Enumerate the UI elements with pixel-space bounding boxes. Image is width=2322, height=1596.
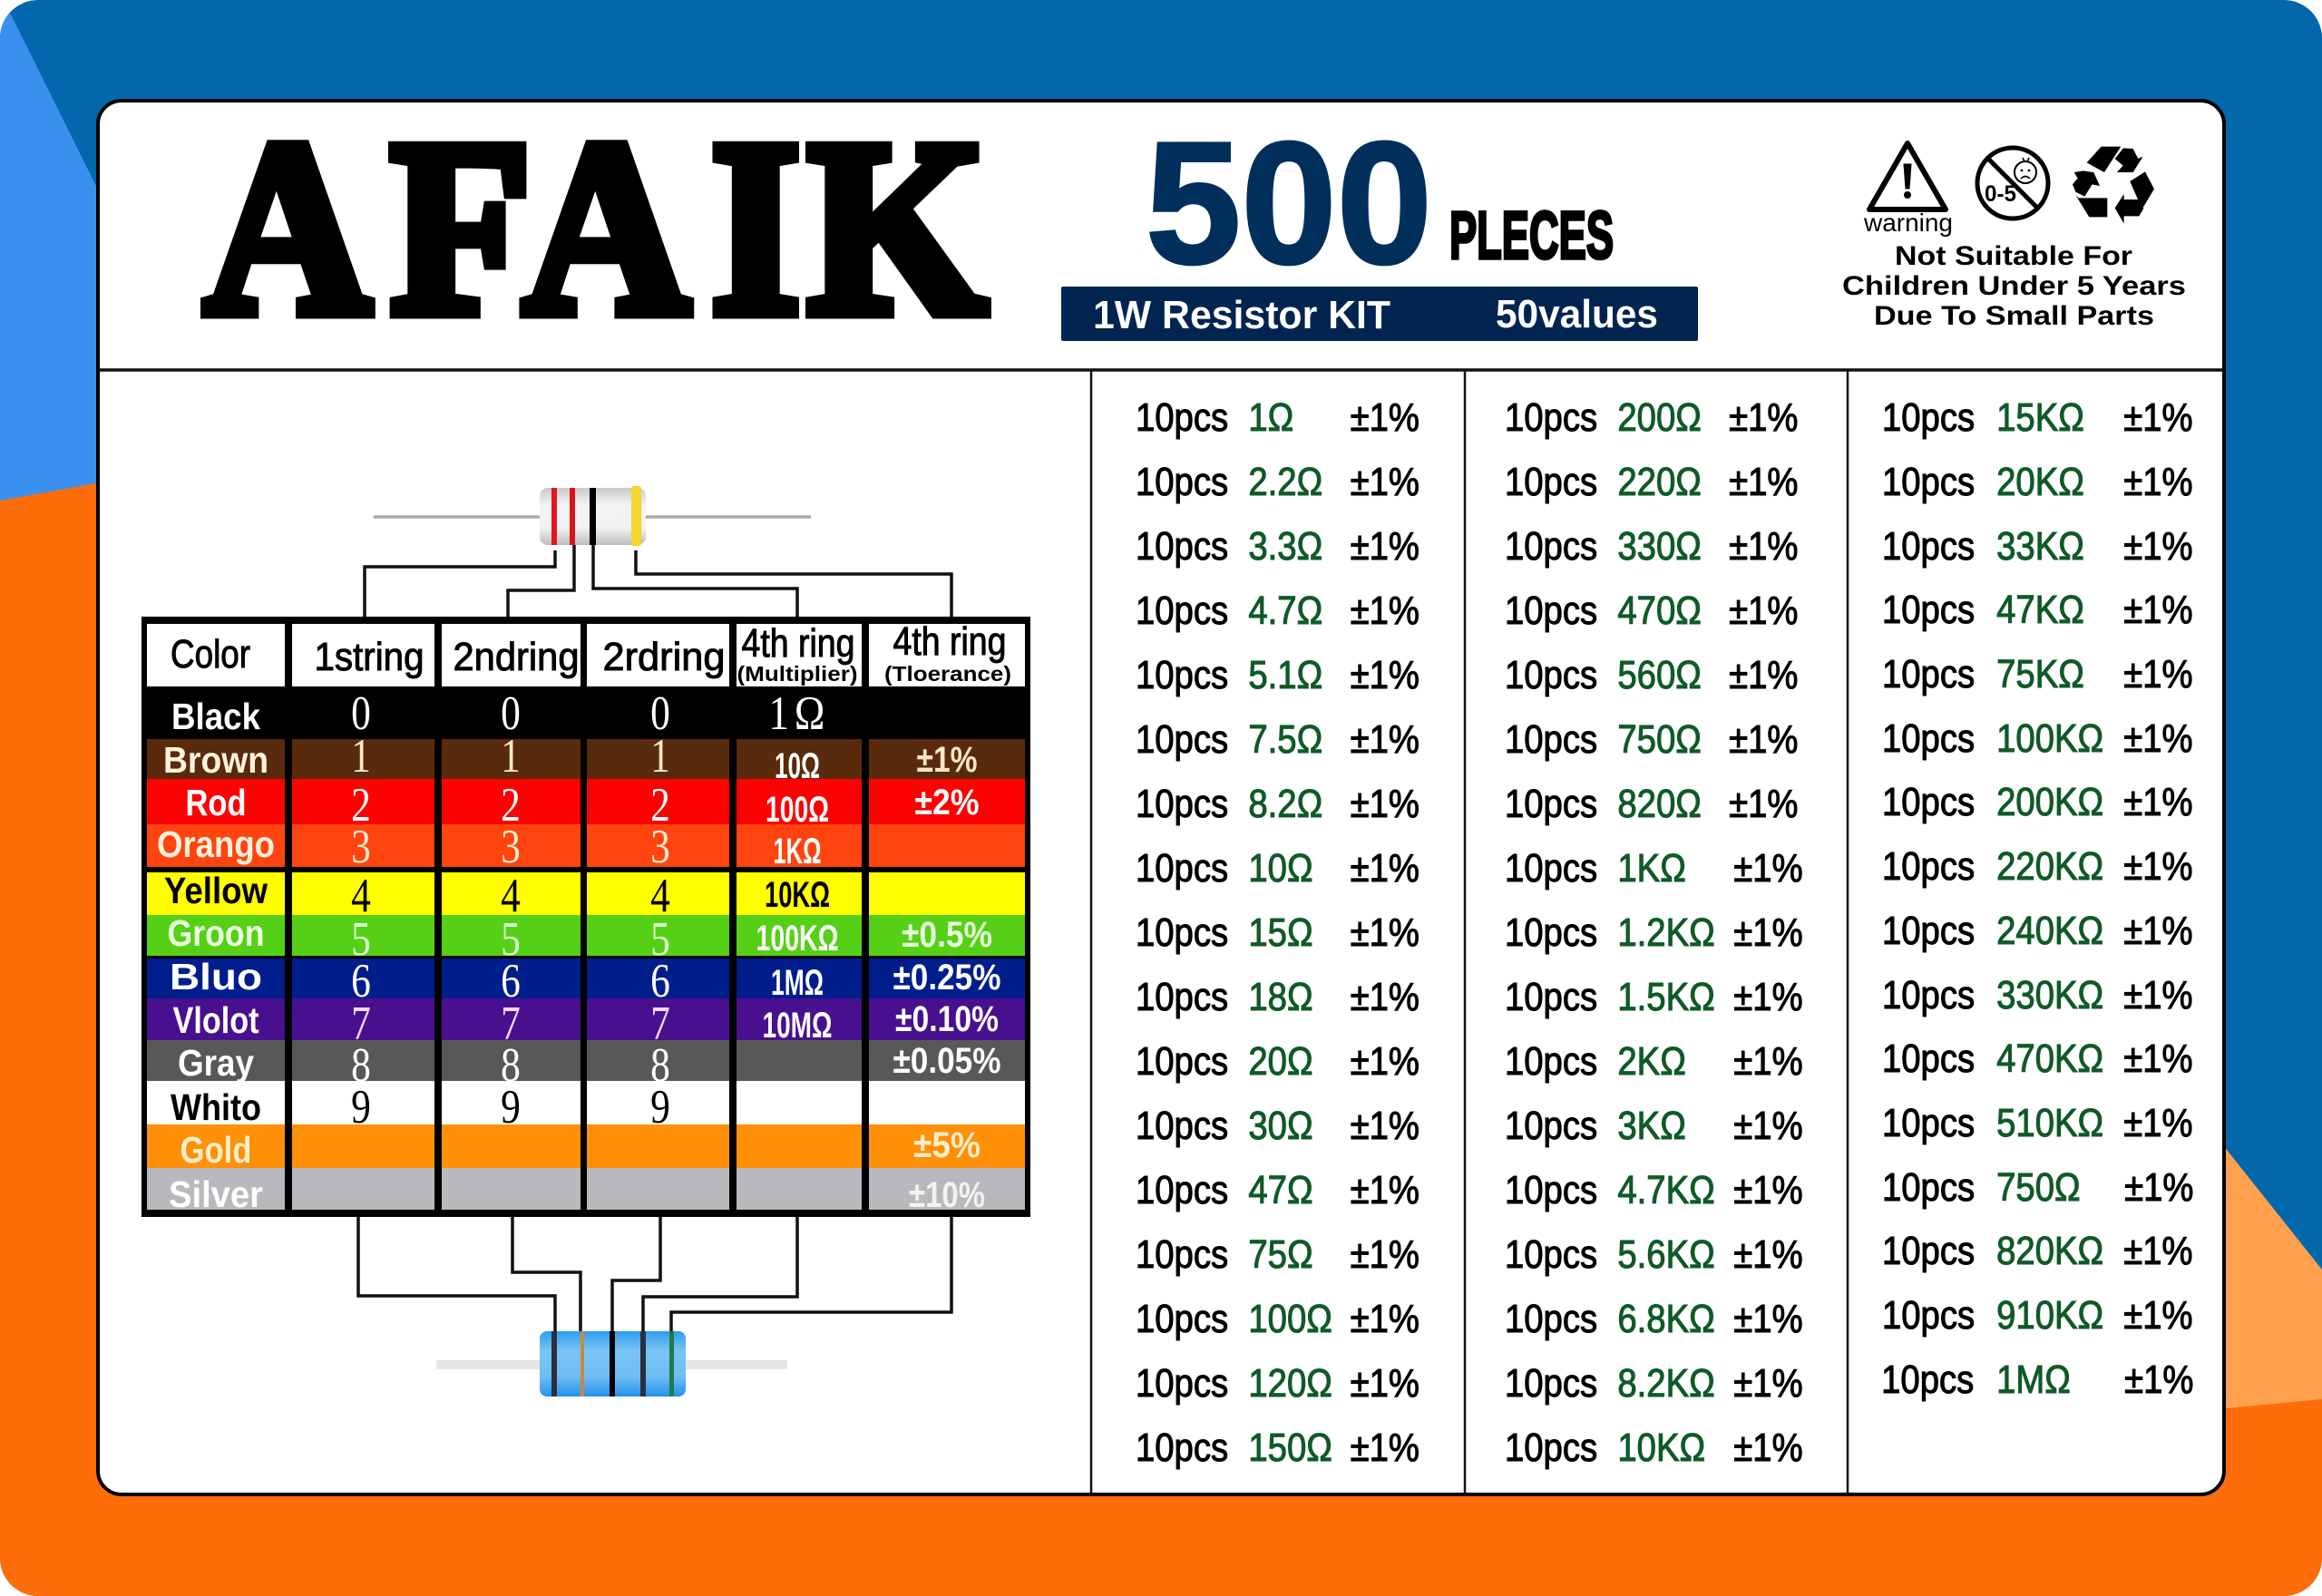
value list column 3: 10pcs [1882,1229,1975,1273]
value list column 1: 1Ω [1248,395,1293,440]
value list column 1: ±1% [1351,846,1420,890]
icon: warning triangle: warning [1863,209,1953,237]
value list column 2: 10pcs [1505,1168,1597,1212]
multiplier column: 10KΩ [765,875,830,915]
value list column 2: 820Ω [1617,782,1702,826]
digit columns: 7 [351,998,371,1050]
digit columns: 6 [351,955,371,1007]
value list column 1: ±1% [1351,653,1420,697]
value list column 1: 8.2Ω [1248,782,1322,826]
value list column 3: 910KΩ [1996,1293,2103,1338]
value list column 3: 820KΩ [1996,1229,2103,1273]
value list column 3: ±1% [2124,1358,2193,1402]
header divider and column dividers [98,370,2224,1494]
value list column 1: 10pcs [1136,975,1228,1019]
value list column 2: ±1% [1729,589,1798,633]
digit columns: 3 [650,821,670,873]
value list column 1: 10pcs [1136,524,1228,569]
column gutters [285,689,869,1212]
value list column 2: 1.2KΩ [1617,910,1715,955]
value list column 1: 5.1Ω [1248,653,1322,697]
value list column 2: 10pcs [1505,589,1597,633]
digit columns: 4 [501,870,521,922]
digit columns: 2 [650,779,670,832]
value list column 3: 10pcs [1882,460,1975,504]
color names [157,696,275,1215]
value list column 2: 560Ω [1617,653,1702,697]
value list column 1: 47Ω [1248,1168,1313,1212]
value list column 1: 10pcs [1136,1232,1228,1277]
connector lines bottom [358,1217,951,1333]
value list column 3: ±1% [2123,652,2193,696]
digit columns: 7 [650,998,670,1050]
value list column 3: 15KΩ [1996,395,2084,440]
value list column 2: 1KΩ [1617,846,1686,890]
digit columns: 9 [650,1081,670,1134]
tolerance column: ±0.25% [893,958,1001,998]
icon: not for ages 0-5: 0-5 [1985,181,2016,207]
value list column 1: 30Ω [1248,1104,1313,1148]
value list column 1: 10pcs [1136,1297,1228,1341]
value list column 2: 8.2KΩ [1617,1361,1715,1406]
value list column 1: 3.3Ω [1248,524,1322,569]
value list column 2: ±1% [1729,524,1798,569]
value list column 3: ±1% [2123,395,2193,440]
tolerance column: ±0.10% [895,999,999,1039]
value list column 2: 200Ω [1617,395,1702,440]
value list column 1: 100Ω [1248,1297,1332,1341]
value list column 3: ±1% [2123,1293,2193,1338]
value list column 3: 10pcs [1881,1358,1974,1402]
color names: Groon [167,912,265,954]
value list column 2: 10pcs [1505,717,1597,762]
value list column 2: ±1% [1733,1039,1803,1084]
value list column 1: 7.5Ω [1248,717,1322,762]
digit columns: 0 [501,687,521,740]
tolerance column: ±1% [916,740,978,780]
value list column 3: 10pcs [1882,716,1975,761]
digit columns: 2 [351,779,371,832]
value list column 1: ±1% [1351,1168,1420,1212]
digit columns: 1 [501,730,521,783]
warning text [1842,241,2186,331]
value list column 2: 2KΩ [1617,1039,1686,1084]
value list column 3: 20KΩ [1996,460,2084,504]
value list column 3: 10pcs [1882,524,1975,569]
value list column 3: ±1% [2124,1165,2193,1210]
digit columns: 5 [501,913,521,966]
multiplier column: 1MΩ [771,963,824,1003]
multiplier column: 1 [768,686,789,740]
value list column 3: ±1% [2123,973,2193,1017]
header cells [147,624,1025,686]
digit columns: 1 [351,730,371,783]
top resistor [374,486,811,546]
digit columns: 4 [351,870,371,922]
value list column 1: 150Ω [1248,1426,1332,1470]
value list column 1: 10pcs [1136,1039,1228,1084]
color names: Orango [157,823,275,865]
value list column 2: 6.8KΩ [1617,1297,1715,1341]
color names: Silver [169,1173,263,1215]
value list column 2: 330Ω [1617,524,1702,569]
digit columns: 0 [351,687,371,740]
value list column 2: 10pcs [1505,1104,1597,1148]
warning text: Children Under 5 Years [1842,271,2186,301]
digit columns: 0 [650,687,670,740]
kit banner: 50values [1496,292,1658,336]
value list column 3: ±1% [2123,716,2193,761]
tolerance column: ±0.5% [902,915,992,955]
value list column 3: 10pcs [1882,973,1975,1017]
icon: recycling arrows [2073,147,2154,224]
value list column 1: ±1% [1351,782,1420,826]
value list column 3: 33KΩ [1996,524,2084,569]
value list column 2: ±1% [1729,460,1798,504]
value list column 1: 75Ω [1248,1232,1313,1277]
value list column 1 [1136,395,1420,1470]
tolerance column [893,740,1001,1215]
kit banner: 1W Resistor KIT [1093,293,1390,337]
value list column 1: 10pcs [1136,589,1228,633]
value list column 1: ±1% [1351,1104,1420,1148]
value list column 2: 1.5KΩ [1617,975,1715,1019]
digit columns: 9 [501,1081,521,1134]
value list column 2: ±1% [1733,910,1803,955]
value list column 3: 10pcs [1882,1165,1975,1210]
tolerance column: ±10% [909,1175,985,1215]
table headings: 2rdring [602,635,726,679]
value list column 2: 10pcs [1505,653,1597,697]
value list column 1: 4.7Ω [1248,589,1322,633]
value list column 2: 10pcs [1505,846,1597,890]
value list column 2: 750Ω [1617,717,1702,762]
table headings: 4th ring [742,621,854,666]
value list column 3: 100KΩ [1996,716,2103,761]
value list column 3: 10pcs [1882,844,1975,889]
digit columns: 8 [351,1039,371,1092]
value list column 3: ±1% [2123,780,2193,824]
multiplier column: 10MΩ [762,1006,833,1046]
value list column 3: 10pcs [1882,652,1975,696]
value list column 1: 10pcs [1136,1361,1228,1406]
value list column 1: 120Ω [1248,1361,1332,1406]
warning text: Not Suitable For [1895,241,2132,271]
value list column 1: 10pcs [1136,653,1228,697]
value list column 3: 75KΩ [1996,652,2084,696]
digit columns: 1 [650,730,670,783]
value list column 3: 1MΩ [1996,1358,2071,1402]
value list column 1: 10pcs [1136,717,1228,762]
value list column 1: 10pcs [1136,460,1228,504]
value list column 2: 10pcs [1505,1232,1597,1277]
value list column 3: 10pcs [1882,588,1975,632]
value list column 1: 10pcs [1136,1426,1228,1470]
color rows [147,739,1025,1210]
value list column 2: ±1% [1733,1426,1803,1470]
value list column 2: 10pcs [1505,1361,1597,1406]
value list column 3: 470KΩ [1996,1036,2103,1081]
value list column 1: 10pcs [1136,1168,1228,1212]
table headings: 2ndring [454,635,579,679]
bottom resistor [436,1331,787,1396]
value list column 1: 10pcs [1136,910,1228,955]
value list column 2: ±1% [1733,1361,1803,1406]
value list column 2: 220Ω [1617,460,1702,504]
value list column 3: 10pcs [1882,780,1975,824]
value list column 2: 10pcs [1505,524,1597,569]
value list column 2: 10pcs [1505,1426,1597,1470]
value list column 1: ±1% [1351,1426,1420,1470]
value list column 1: ±1% [1351,524,1420,569]
value list column 1: ±1% [1351,975,1420,1019]
digit columns: 5 [351,913,371,966]
value list column 1: ±1% [1351,589,1420,633]
value list column 3 [1881,395,2193,1402]
kit banner [1061,287,1698,341]
value list column 1: 20Ω [1248,1039,1313,1084]
value list column 1: ±1% [1351,717,1420,762]
digit columns: 5 [650,913,670,966]
value list column 2: ±1% [1733,975,1803,1019]
color names: Whito [171,1086,261,1128]
digit columns: 6 [650,955,670,1007]
value list column 3: ±1% [2123,588,2193,632]
multiplier column: 1KΩ [773,832,822,871]
piece count 500: 500 [1146,105,1432,300]
value list column 1: 10pcs [1136,1104,1228,1148]
value list column 3: ±1% [2123,909,2193,953]
value list column 2 [1505,395,1803,1470]
color names: Vlolot [172,999,259,1041]
value list column 2: 4.7KΩ [1617,1168,1715,1212]
digit columns: 4 [650,870,670,922]
value list column 3: 750Ω [1996,1165,2081,1210]
table headings [171,619,1011,686]
table headings: (Multiplier) [737,662,858,686]
value list column 1: 10pcs [1136,782,1228,826]
value list column 2: ±1% [1733,846,1803,890]
warning text: Due To Small Parts [1874,301,2154,331]
value list column 1: 10pcs [1136,846,1228,890]
multiplier column: 100Ω [766,790,829,830]
color names: Yellow [164,870,268,911]
value list column 1: ±1% [1351,395,1420,440]
pieces label: PLECES [1449,198,1614,273]
value list column 3: ±1% [2123,460,2193,504]
value list column 3: 10pcs [1882,395,1975,440]
value list column 2: 10pcs [1505,1039,1597,1084]
value list column 2: ±1% [1729,395,1798,440]
value list column 1: ±1% [1351,910,1420,955]
color names: Rod [185,782,247,823]
value list column 2: ±1% [1729,653,1798,697]
value list column 3: 10pcs [1882,1293,1975,1338]
brand title: AFAIK [204,90,988,366]
value list column 3: 510KΩ [1996,1101,2103,1145]
value list column 3: 240KΩ [1996,909,2103,953]
digit columns: 2 [501,779,521,832]
value list column 3: 10pcs [1882,1101,1975,1145]
value list column 1: ±1% [1351,1232,1420,1277]
value list column 2: 10pcs [1505,395,1597,440]
value list column 3: ±1% [2123,844,2193,889]
value list column 2: 3KΩ [1617,1104,1686,1148]
value list column 2: 10pcs [1505,460,1597,504]
icon: not for ages 0-5 [1977,148,2048,219]
value list column 1: ±1% [1351,1297,1420,1341]
value list column 2: 10pcs [1505,1297,1597,1341]
table headings: (Tloerance) [884,662,1011,686]
value list column 2: 10pcs [1505,910,1597,955]
value list column 2: 10pcs [1505,975,1597,1019]
value list column 3: 330KΩ [1996,973,2103,1017]
value list column 2: ±1% [1729,717,1798,762]
digit columns: 8 [501,1039,521,1092]
table headings: 1string [314,635,424,679]
color code table [141,617,1030,1217]
value list column 2: 470Ω [1617,589,1702,633]
card panel [98,101,2224,1494]
value list column 2: 10KΩ [1617,1426,1705,1470]
value list column 2: 10pcs [1505,782,1597,826]
digit columns: 7 [501,998,521,1050]
multiplier column: Ω [795,686,824,740]
value list column 3: 10pcs [1882,909,1975,953]
value list column 3: 200KΩ [1996,780,2103,824]
value list column 3: 220KΩ [1996,844,2103,889]
digit columns [351,687,670,1134]
value list column 1: ±1% [1351,460,1420,504]
digit columns: 3 [501,821,521,873]
digit columns: 6 [501,955,521,1007]
value list column 3: ±1% [2123,524,2193,569]
value list column 1: ±1% [1351,1361,1420,1406]
value list column 2: ±1% [1733,1168,1803,1212]
value list column 1: 15Ω [1248,910,1313,955]
tolerance column: ±2% [914,783,980,822]
value list column 1: 2.2Ω [1248,460,1322,504]
multiplier column [756,686,838,1046]
color names: Gray [178,1042,254,1084]
digit columns: 9 [351,1081,371,1134]
tolerance column: ±5% [913,1125,981,1165]
value list column 1: ±1% [1351,1039,1420,1084]
color names: Bluo [170,956,262,998]
digit columns: 3 [351,821,371,873]
multiplier column: 10Ω [775,746,820,786]
table headings: 4th ring [893,619,1007,664]
icon: warning triangle [1863,143,1953,237]
value list column 3: ±1% [2123,1036,2193,1081]
value list column 1: 10Ω [1248,846,1313,890]
color names: Brown [163,739,268,781]
digit columns: 8 [650,1039,670,1092]
value list column 3: ±1% [2123,1101,2193,1145]
value list column 1: 18Ω [1248,975,1313,1019]
color names: Gold [180,1129,252,1171]
value list column 1: 10pcs [1136,395,1228,440]
value list column 2: ±1% [1729,782,1798,826]
value list column 2: ±1% [1733,1297,1803,1341]
value list column 2: ±1% [1733,1232,1803,1277]
value list column 2: ±1% [1733,1104,1803,1148]
table headings: Color [171,632,250,676]
tolerance column: ±0.05% [893,1041,1001,1081]
multiplier column: 100KΩ [756,919,838,959]
value list column 3: 10pcs [1882,1036,1975,1081]
value list column 2: 5.6KΩ [1617,1232,1715,1277]
color names: Black [171,696,260,737]
value list column 3: 47KΩ [1996,588,2084,632]
value list column 3: ±1% [2123,1229,2193,1273]
connector lines top [365,545,951,617]
